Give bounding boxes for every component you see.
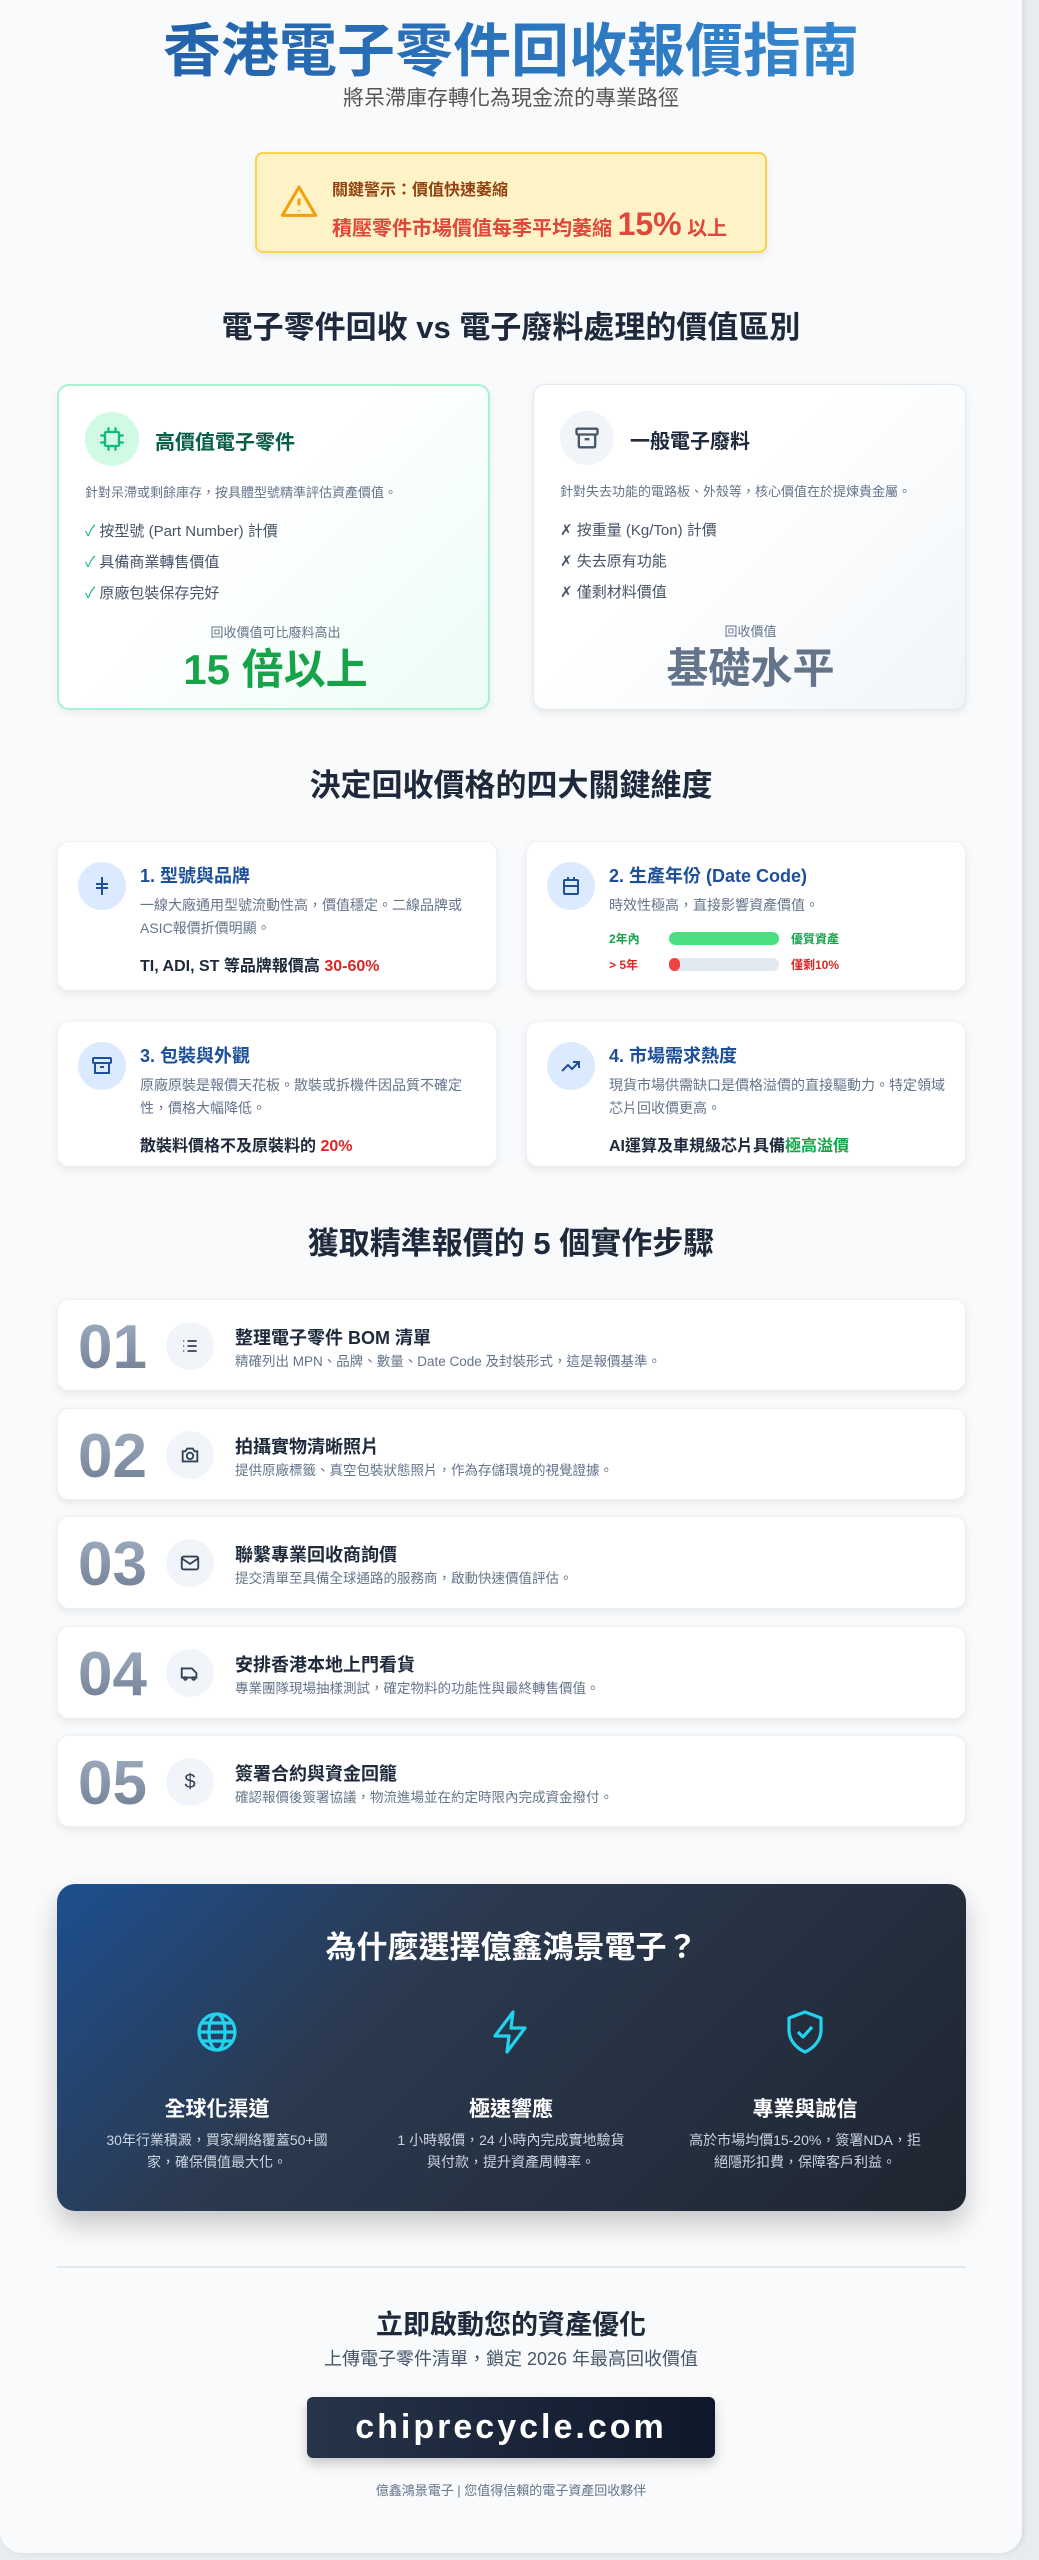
chart: date code bars bbox=[609, 932, 839, 972]
chart: date code bars: 僅剩10% bbox=[791, 958, 839, 972]
panel: general e-waste: 一般電子廢料 bbox=[630, 431, 750, 453]
panel: general e-waste bbox=[533, 384, 966, 710]
icon: mail bbox=[166, 1539, 214, 1587]
step 4: 安排香港本地上門看貨 bbox=[235, 1655, 415, 1675]
panel: high value components: ✓ 原廠包裝保存完好 bbox=[85, 585, 219, 602]
step 5: 確認報價後簽署協議，物流進場並在約定時限內完成資金撥付。 bbox=[235, 1790, 613, 1805]
panel: general e-waste: 基礎水平 bbox=[666, 645, 834, 692]
step 5: 05 bbox=[78, 1749, 147, 1818]
feature: trust: 專業與誠信 bbox=[752, 2098, 858, 2121]
callout: warning bbox=[255, 152, 767, 253]
title: 香港電子零件回收報價指南 bbox=[163, 19, 859, 84]
footer: 億鑫鴻景電子 | 您值得信賴的電子資產回收夥伴 bbox=[376, 2483, 646, 2498]
panel: factor 4 bbox=[526, 1021, 966, 1167]
icon: camera bbox=[166, 1431, 214, 1479]
panel: general e-waste: 回收價值 bbox=[724, 624, 776, 639]
feature: speed bbox=[397, 2010, 625, 2170]
step 2: 拍攝實物清晰照片 bbox=[235, 1437, 379, 1457]
step 2: 02 bbox=[78, 1422, 147, 1491]
panel: high value components: ✓ 具備商業轉售價值 bbox=[85, 554, 219, 571]
icon: list bbox=[166, 1322, 214, 1370]
panel: factor 3: 散裝料價格不及原裝料的 20% bbox=[140, 1138, 352, 1155]
feature: trust: 高於市場均價15-20%，簽署NDA，拒絕隱形扣費，保障客戶利益。 bbox=[689, 2132, 921, 2170]
panel: factor 1 bbox=[57, 841, 497, 991]
step 4: 04 bbox=[78, 1640, 147, 1709]
panel: factor 1: 一線大廠通用型號流動性高，價值穩定。二線品牌或ASIC報價折價明顯。 bbox=[140, 897, 462, 936]
panel: factor 2 bbox=[526, 841, 966, 991]
panel: general e-waste: ✗ 失去原有功能 bbox=[560, 553, 667, 570]
step 4 bbox=[57, 1626, 966, 1719]
step 1: 精確列出 MPN、品牌、數量、Date Code 及封裝形式，這是報價基準。 bbox=[235, 1354, 661, 1369]
panel: factor 2: 時效性極高，直接影響資產價值。 bbox=[609, 897, 819, 913]
icon: globe bbox=[197, 2012, 237, 2052]
panel: factor 3: 3. 包裝與外觀 bbox=[140, 1046, 250, 1066]
icon: dollar: $ bbox=[184, 1770, 196, 1792]
panel: factor 3 bbox=[57, 1021, 497, 1167]
CTA heading: 立即啟動您的資產優化 bbox=[376, 2310, 646, 2340]
step 5 bbox=[57, 1735, 966, 1827]
panel: high value components: 回收價值可比廢料高出 bbox=[210, 625, 340, 640]
heading: five steps: 獲取精準報價的 5 個實作步驟 bbox=[308, 1226, 714, 1261]
panel: general e-waste: ✗ 僅剩材料價值 bbox=[560, 584, 667, 601]
panel: why choose us: 為什麼選擇億鑫鴻景電子？ bbox=[326, 1930, 698, 1965]
icon: dollar bbox=[166, 1758, 214, 1806]
panel: factor 4: 現貨市場供需缺口是價格溢價的直接驅動力。特定領域芯片回收價更高。 bbox=[609, 1077, 945, 1116]
step 3: 提交清單至具備全球通路的服務商，啟動快速價值評估。 bbox=[235, 1571, 572, 1586]
panel: factor 1: TI, ADI, ST 等品牌報價高 30-60% bbox=[140, 958, 379, 975]
warning text: 積壓零件市場價值每季平均萎縮 15% 以上 bbox=[332, 206, 727, 242]
step 3 bbox=[57, 1516, 966, 1609]
feature: speed: 極速響應 bbox=[469, 2098, 553, 2121]
panel: high value components: 15 倍以上 bbox=[183, 646, 368, 693]
icon: trend bbox=[547, 1042, 595, 1090]
heading: comparison: 電子零件回收 vs 電子廢料處理的價值區別 bbox=[222, 310, 800, 345]
warning text bbox=[332, 181, 727, 242]
panel: factor 2: 2. 生產年份 (Date Code) bbox=[609, 866, 807, 886]
CTA button: chiprecycle.com bbox=[355, 2408, 667, 2446]
chart: date code bars: > 5年 bbox=[609, 958, 638, 972]
step 1: 01 bbox=[78, 1313, 147, 1382]
feature: speed: 1 小時報價，24 小時內完成實地驗貨與付款，提升資產周轉率。 bbox=[397, 2132, 625, 2170]
panel: high value components: 針對呆滯或剩餘庫存，按具體型號精準評估資產價值。 bbox=[85, 485, 397, 500]
icon: chip bbox=[85, 412, 139, 466]
warning text: 關鍵警示：價值快速萎縮 bbox=[332, 182, 508, 199]
title bbox=[0, 4, 1022, 88]
panel: why choose us bbox=[57, 1884, 966, 2211]
panel: high value components bbox=[57, 384, 490, 710]
panel: factor 4: 4. 市場需求熱度 bbox=[609, 1046, 737, 1066]
CTA subtitle: 上傳電子零件清單，鎖定 2026 年最高回收價值 bbox=[324, 2349, 698, 2369]
heading: four factors: 決定回收價格的四大關鍵維度 bbox=[310, 768, 712, 803]
step 2 bbox=[57, 1408, 966, 1500]
icon: archive bbox=[560, 411, 614, 465]
icon: truck bbox=[166, 1649, 214, 1697]
icon: brand bbox=[78, 862, 126, 910]
icon: package bbox=[78, 1042, 126, 1090]
icon: warning bbox=[280, 185, 318, 217]
chart: date code bars: 優質資產 bbox=[791, 932, 839, 946]
panel: factor 1: 1. 型號與品牌 bbox=[140, 866, 250, 886]
chart: date code bars: 2年內 bbox=[609, 932, 640, 946]
icon: shield bbox=[787, 2010, 823, 2054]
step 1 bbox=[57, 1299, 966, 1391]
step 2: 提供原廠標籤、真空包裝狀態照片，作為存儲環境的視覺證據。 bbox=[235, 1463, 613, 1478]
step 4: 專業團隊現場抽樣測試，確定物料的功能性與最終轉售價值。 bbox=[235, 1681, 600, 1696]
step 1: 整理電子零件 BOM 清單 bbox=[235, 1328, 431, 1348]
step 5: 簽署合約與資金回籠 bbox=[235, 1764, 397, 1784]
CTA button bbox=[307, 2397, 715, 2458]
panel: general e-waste: 針對失去功能的電路板、外殼等，核心價值在於提煉貴金屬。 bbox=[560, 484, 911, 499]
icon: calendar bbox=[547, 862, 595, 910]
panel: factor 3: 原廠原裝是報價天花板。散裝或拆機件因品質不確定性，價格大幅降低。 bbox=[140, 1077, 462, 1116]
panel: high value components: 高價值電子零件 bbox=[155, 432, 295, 454]
step 3: 聯繫專業回收商詢價 bbox=[235, 1545, 397, 1565]
panel: factor 4: AI運算及車規級芯片具備極高溢價 bbox=[609, 1138, 849, 1155]
panel: high value components: ✓ 按型號 (Part Number) 計價 bbox=[85, 523, 278, 540]
icon: lightning bbox=[493, 2010, 527, 2054]
panel: general e-waste: ✗ 按重量 (Kg/Ton) 計價 bbox=[560, 522, 717, 539]
subtitle: 將呆滯庫存轉化為現金流的專業路徑 bbox=[343, 87, 679, 110]
feature: global bbox=[106, 2012, 328, 2170]
feature: global: 30年行業積澱，買家網絡覆蓋50+國家，確保價值最大化。 bbox=[106, 2132, 328, 2170]
step 3: 03 bbox=[78, 1530, 147, 1599]
feature: global: 全球化渠道 bbox=[164, 2098, 270, 2121]
feature: trust bbox=[689, 2010, 921, 2170]
